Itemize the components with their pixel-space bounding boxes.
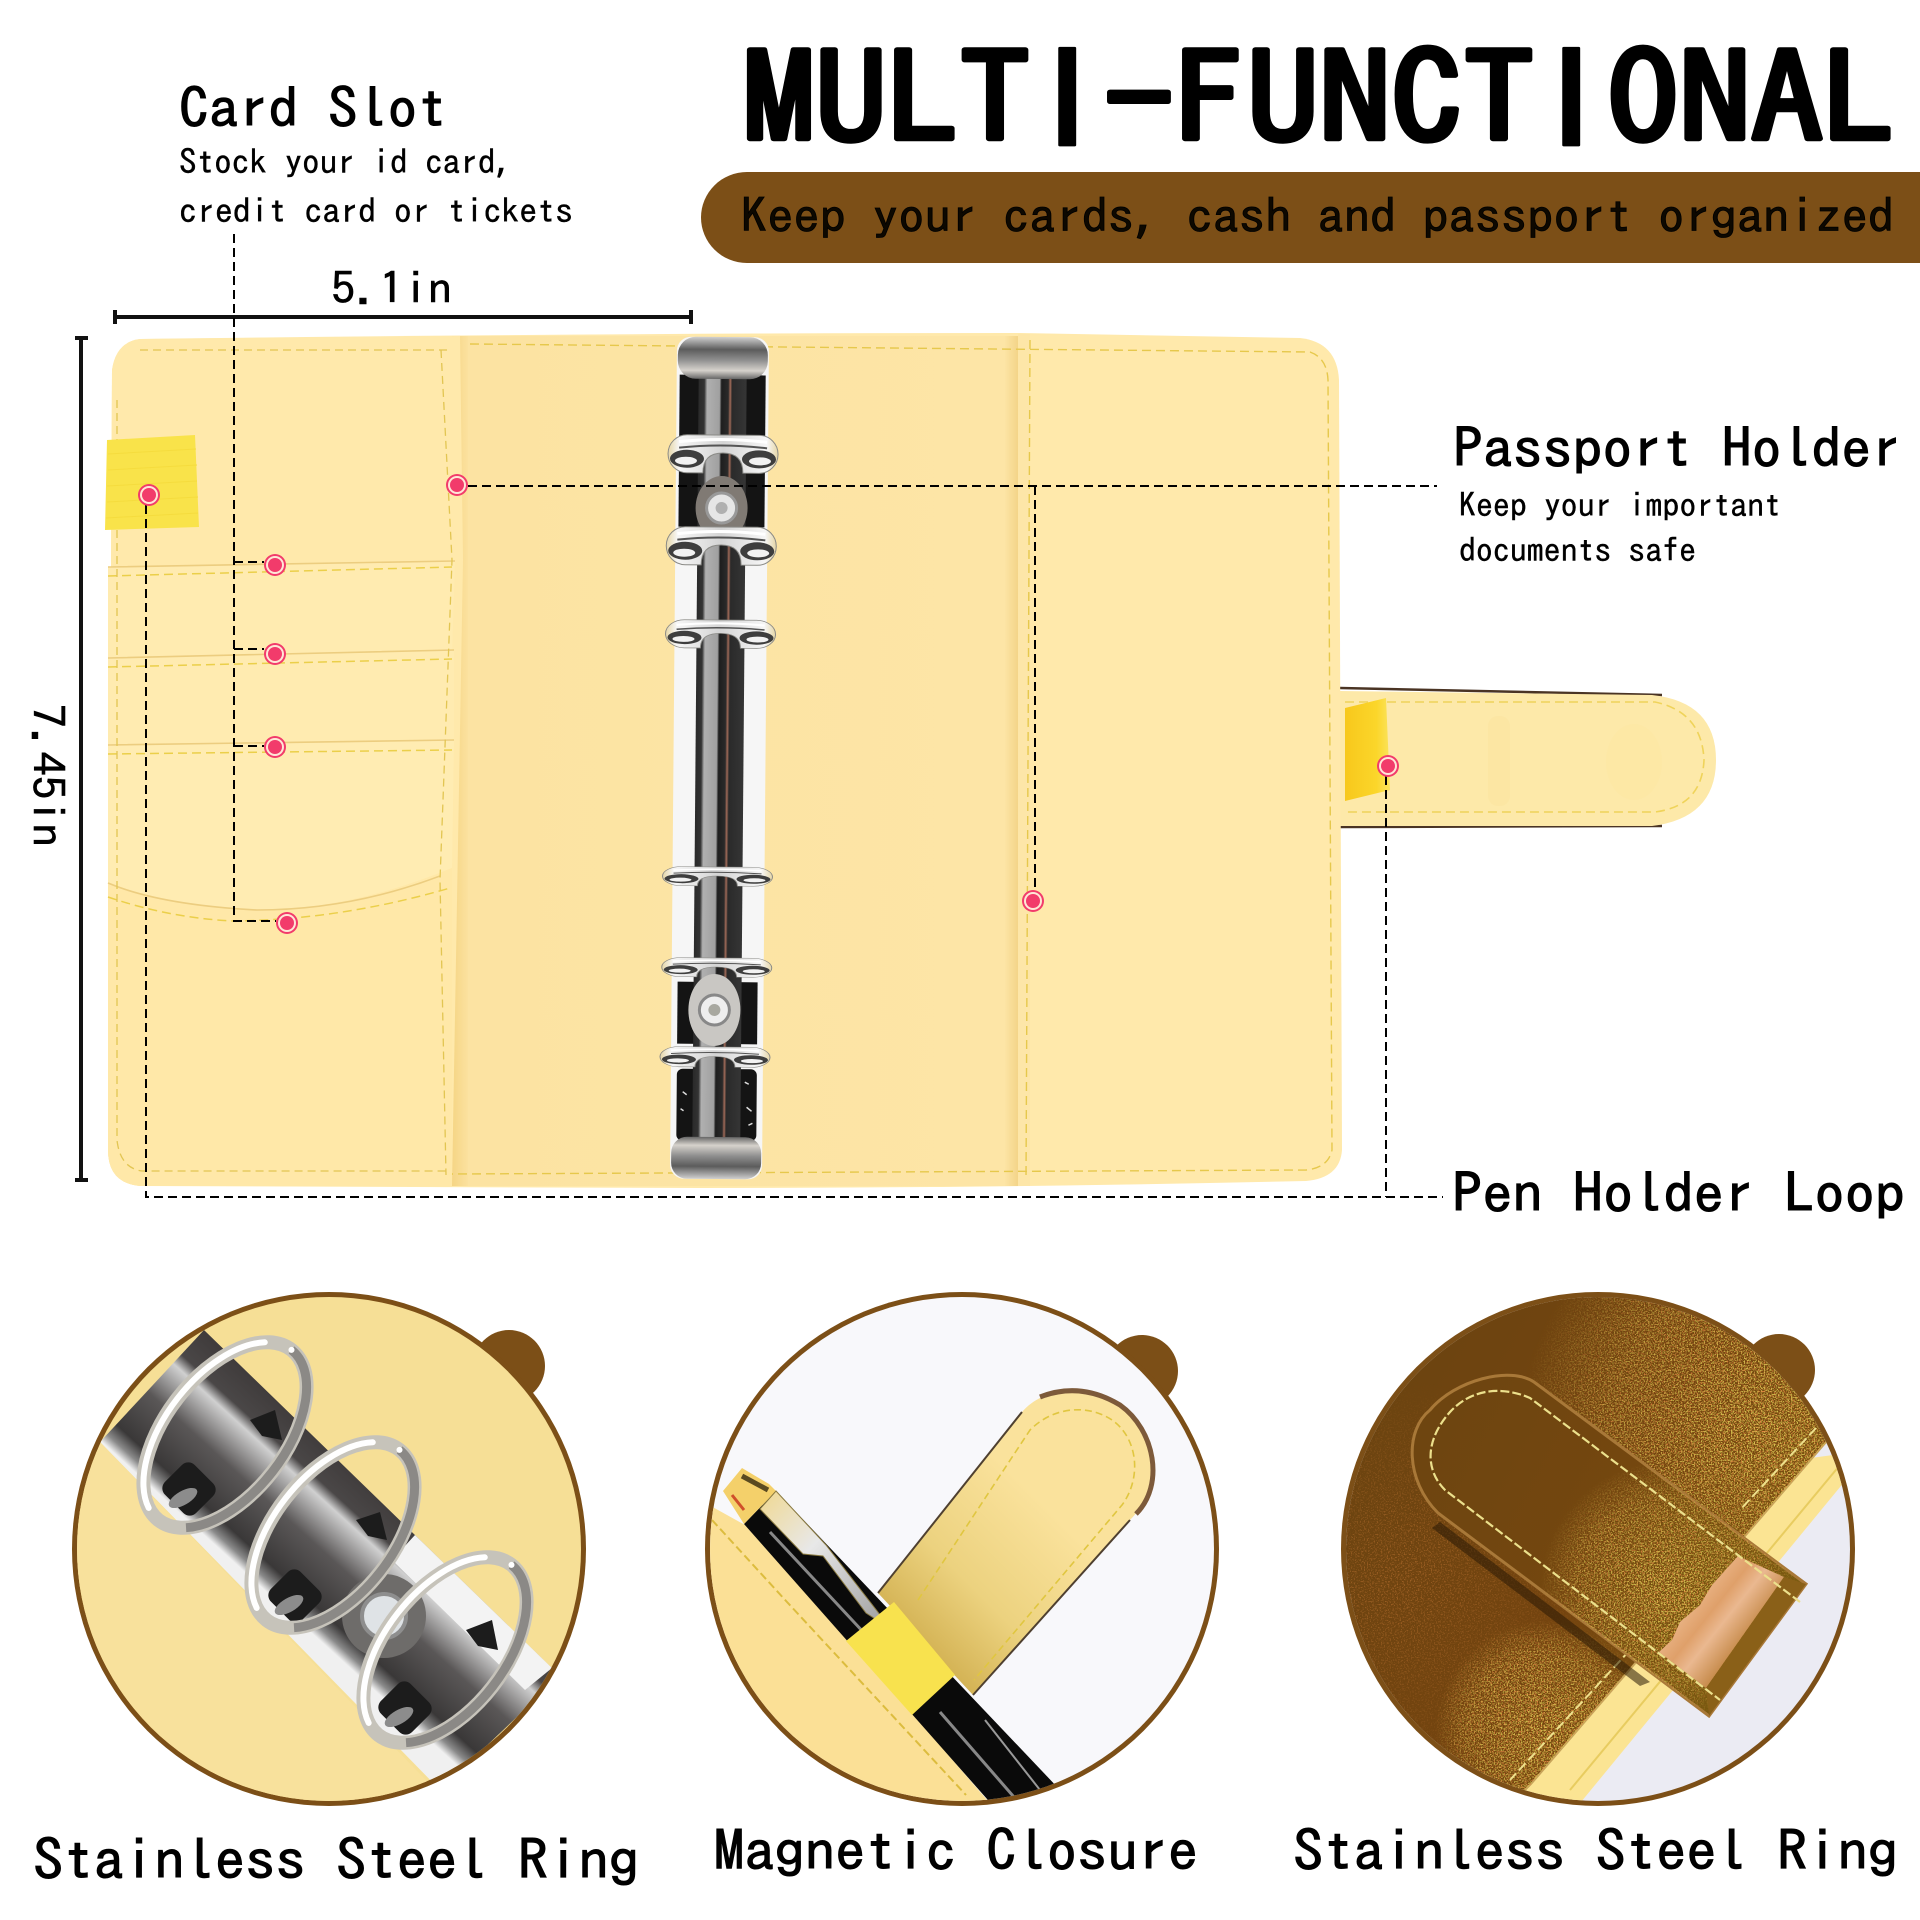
bright strip: [392, 1535, 552, 1690]
detail circle: holographic cover: [1340, 1290, 1870, 1820]
callout text: card slot: Card Slot: [179, 80, 447, 135]
top cap: [678, 337, 768, 379]
brown ear: [1743, 1334, 1815, 1406]
callout text: passport holder: Passport Holder: [1453, 420, 1901, 475]
binder page: [710, 1508, 987, 1801]
brown border: [1341, 1292, 1855, 1806]
eyelet upper: [695, 476, 748, 540]
brown ear: [1106, 1335, 1178, 1407]
pen clip: [760, 1491, 891, 1629]
title: MULT: [743, 35, 1031, 161]
dashed leader lines: [146, 234, 1443, 1197]
binder leather body: [108, 333, 1342, 1188]
callout text: pen holder loop: Pen Holder Loop: [1452, 1165, 1905, 1220]
callout markers: [138, 474, 1399, 934]
pen holder elastic loop: [105, 435, 199, 530]
callout text: passport holder: Keep your important: [1459, 488, 1781, 521]
label: magnetic closure: Magnetic Closure: [714, 1822, 1198, 1878]
title: ONAL: [1607, 35, 1895, 161]
dark upper panel: [678, 375, 766, 527]
brown border: [705, 1292, 1219, 1806]
metal band: [100, 1330, 560, 1790]
glitter on cover: [1340, 1290, 1860, 1810]
brown ear: [473, 1330, 545, 1402]
brown border: [72, 1292, 586, 1806]
dimension: height 7.45in: [26, 338, 88, 1180]
callout text: card slot: [179, 80, 573, 228]
bottom cap: [671, 1137, 761, 1179]
callout text: passport holder: [1453, 420, 1901, 566]
eyelet lower: [688, 974, 741, 1046]
callout text: card slot: Stock your id card,: [179, 145, 513, 179]
strap copper highlight: [1659, 1556, 1784, 1688]
dimension: width 5.1in: 5.1in: [331, 266, 452, 310]
slots: [159, 1410, 498, 1738]
metal plate: [670, 337, 769, 1179]
strap shadow: [1432, 1522, 1650, 1686]
ring mechanism: [659, 337, 779, 1179]
detail circle: steel rings: [60, 1290, 592, 1820]
flap stitch: [918, 1410, 1135, 1680]
photo content: [60, 1290, 592, 1820]
subtitle banner: [701, 172, 1920, 263]
pen cap: [723, 1468, 776, 1524]
yellow flap: [878, 1391, 1152, 1695]
cover leather: [1340, 1290, 1860, 1815]
cover stitch: [1510, 1428, 1816, 1780]
dimension: height 7.45in: 7.45in: [26, 704, 70, 847]
title: I: [1549, 18, 1593, 175]
photo content: [700, 1290, 1220, 1825]
dimension: width 5.1in: [115, 266, 691, 324]
clasp tab: [1340, 688, 1716, 827]
left pockets: [108, 336, 463, 1186]
label: stainless steel ring 2: Stainless Steel Ring: [1293, 1822, 1898, 1878]
callout text: passport holder: documents safe: [1459, 533, 1696, 566]
three rings: [136, 1335, 534, 1750]
central spine: [692, 377, 747, 1142]
rings: [660, 435, 778, 1068]
strap: [1412, 1375, 1806, 1716]
other stitching: [452, 340, 1332, 1180]
detail circle: magnetic closure: [700, 1290, 1220, 1825]
flap edge: [1040, 1391, 1153, 1514]
strap glitter: [1340, 1290, 1860, 1810]
title: -FUNCT: [1103, 35, 1535, 161]
label: stainless steel ring: Stainless Steel Ring: [33, 1831, 639, 1887]
title: I: [1045, 18, 1089, 175]
lower-left panel: [77, 1442, 427, 1801]
binder edge stitch: [712, 1520, 966, 1795]
speckles: [680, 1082, 753, 1125]
yellow page edge: [1500, 1450, 1870, 1820]
elastic pen loop: [846, 1602, 955, 1715]
photo content: [1340, 1290, 1870, 1820]
pen body: [744, 1491, 1060, 1825]
callout text: card slot: credit card or tickets: [179, 194, 573, 228]
strap end band: [1706, 1577, 1806, 1716]
dark lower panels: [676, 982, 758, 1141]
page stitch: [1570, 1465, 1840, 1790]
binder product photo: [105, 333, 1716, 1188]
strap stitch: [1431, 1391, 1800, 1700]
subtitle banner: Keep your cards, cash and passport organized: [741, 191, 1894, 239]
eyelet: [342, 1574, 426, 1658]
